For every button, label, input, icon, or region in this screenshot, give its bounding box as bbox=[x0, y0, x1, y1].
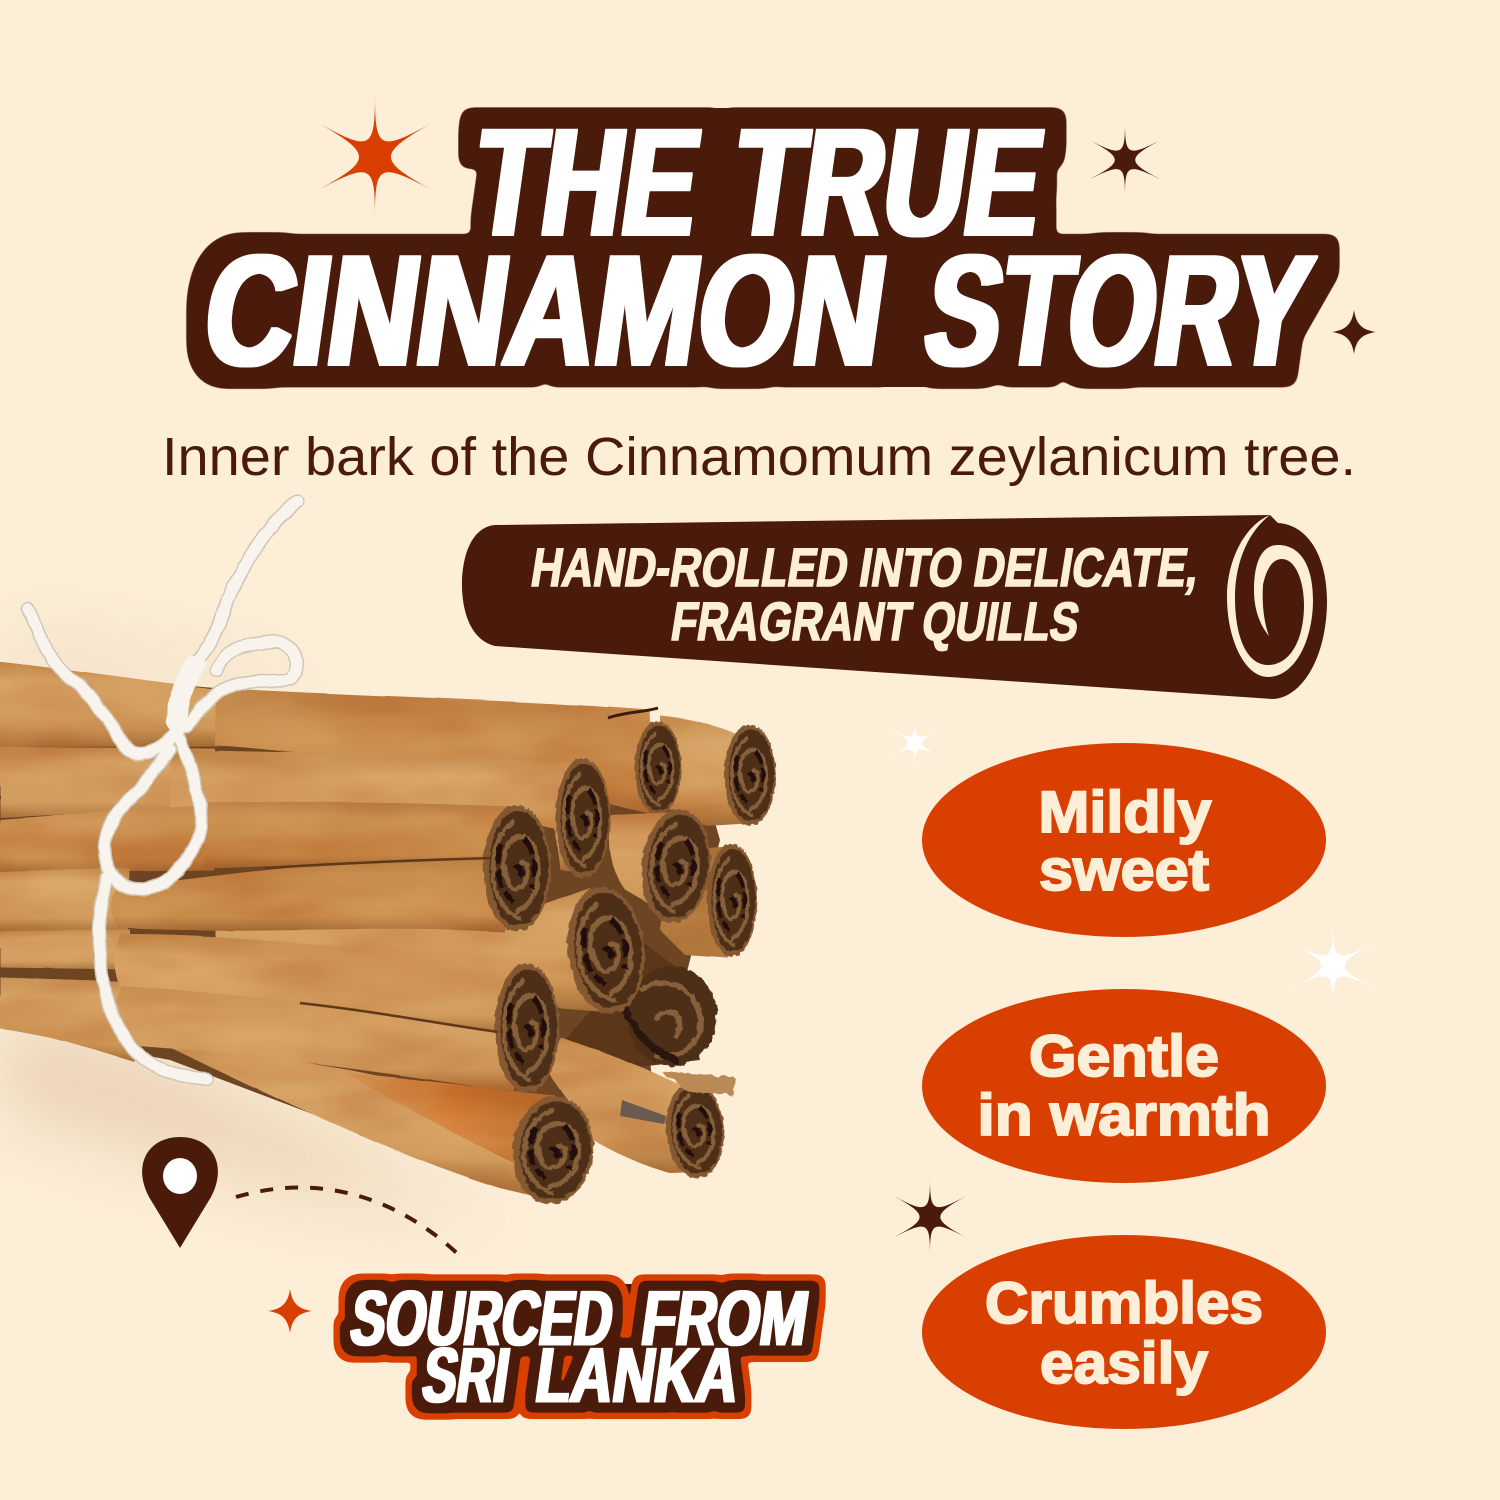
stick H front lower top bbox=[114, 934, 510, 1038]
stick F bbox=[660, 846, 728, 958]
title word: story: STORY bbox=[915, 222, 1322, 399]
quill text bbox=[527, 537, 1204, 652]
star: orange bbox=[320, 94, 430, 217]
badge: sourced from sri lanka bbox=[346, 1274, 814, 1419]
badge outline joins bbox=[500, 1284, 645, 1408]
oval: crumbles easily bbox=[922, 1235, 1326, 1429]
oval: gentle in warmth: Gentle bbox=[1029, 1024, 1219, 1089]
stick B rear right bbox=[660, 716, 755, 825]
oval: mildly sweet bbox=[922, 743, 1326, 937]
stick J dark bbox=[565, 940, 700, 1068]
stick D upper bbox=[205, 802, 515, 868]
oval: crumbles easily: easily bbox=[1040, 1331, 1208, 1396]
title word: true: TRUE bbox=[723, 97, 1053, 268]
star: white top bbox=[890, 717, 940, 768]
quill text: HAND-ROLLED INTO DELICATE, bbox=[527, 537, 1204, 598]
title word: the: THE bbox=[464, 97, 710, 268]
star: dark lower bbox=[894, 1177, 966, 1255]
badge word: sri: SRI bbox=[418, 1331, 515, 1419]
quill spiral end bbox=[1227, 515, 1313, 677]
stick C bbox=[170, 750, 585, 872]
dashed route bbox=[236, 1188, 460, 1256]
title outline joins bbox=[695, 108, 935, 387]
quill body bbox=[462, 515, 1327, 699]
cinnamon bundle bbox=[0, 501, 776, 1208]
banner: quill bbox=[462, 515, 1327, 699]
stick G bbox=[215, 888, 610, 1012]
twine bbox=[28, 501, 298, 1079]
oval: gentle in warmth: in warmth bbox=[978, 1083, 1270, 1148]
subtitle: Inner bark of the Cinnamomum zeylanicum tree. bbox=[162, 427, 1356, 487]
title bbox=[194, 97, 1322, 399]
star: dark sparkle by title bbox=[1332, 310, 1376, 354]
bundle base silhouette bbox=[0, 662, 720, 1190]
left stick tails bbox=[0, 662, 235, 1062]
icon: location pin bbox=[142, 1137, 218, 1248]
stick L bottom bbox=[150, 1038, 540, 1195]
stick E bbox=[609, 812, 680, 922]
oval: mildly sweet: Mildly bbox=[1038, 780, 1212, 845]
badge word: lanka: LANKA bbox=[531, 1331, 745, 1419]
badge word: from: FROM bbox=[637, 1274, 814, 1362]
quill text: FRAGRANT QUILLS bbox=[667, 591, 1084, 652]
badge word: sourced: SOURCED bbox=[346, 1274, 619, 1362]
oval: mildly sweet: sweet bbox=[1039, 838, 1209, 903]
title word: cinnamon: CINNAMON bbox=[194, 222, 897, 399]
stick K lower right bbox=[545, 1037, 695, 1173]
stick I front lower bottom bbox=[114, 987, 515, 1092]
stick D lower bbox=[110, 856, 510, 932]
star: dark top right bbox=[1090, 122, 1160, 196]
oval: gentle in warmth bbox=[922, 989, 1326, 1183]
bundle shadow bbox=[0, 625, 500, 1215]
star: white middle bbox=[1292, 923, 1374, 1007]
stick A top bbox=[215, 688, 655, 815]
star: orange sparkle bbox=[268, 1289, 312, 1333]
stick seams bbox=[265, 858, 498, 1032]
oval: crumbles easily: Crumbles bbox=[985, 1271, 1263, 1336]
